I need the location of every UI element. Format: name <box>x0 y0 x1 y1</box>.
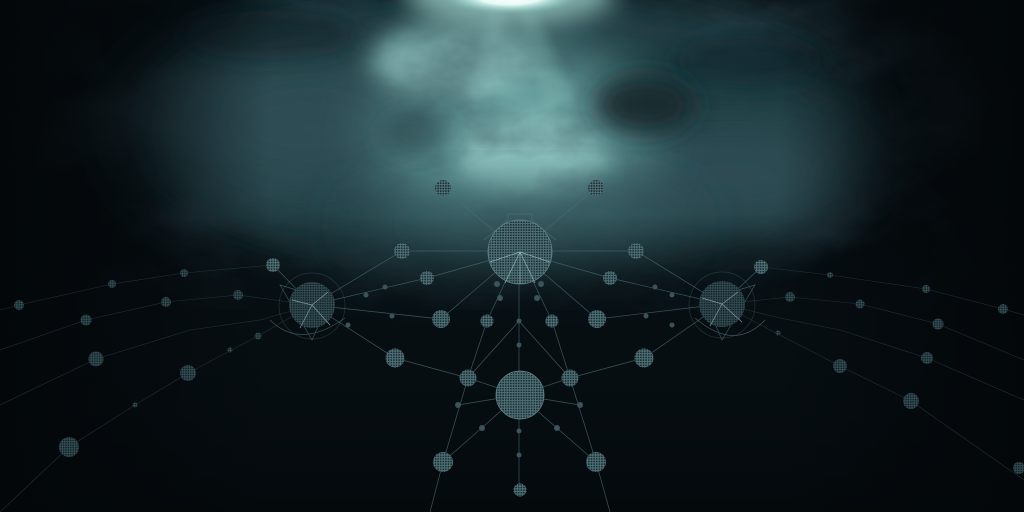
network connections <box>273 188 761 512</box>
far left nodes <box>14 269 262 457</box>
side network strands <box>0 265 1024 512</box>
hub: bottom centre <box>496 371 544 419</box>
hub: top centre <box>488 220 552 284</box>
cloud glow <box>120 0 880 280</box>
hub cages <box>270 214 765 340</box>
light source at top <box>405 0 615 110</box>
hub: left <box>289 282 335 328</box>
medium nodes <box>266 180 768 496</box>
cloud texture <box>167 0 904 276</box>
small link nodes <box>346 281 674 458</box>
far right nodes <box>776 272 1024 474</box>
dark cloud patches <box>180 11 825 157</box>
hub: right <box>699 281 745 327</box>
